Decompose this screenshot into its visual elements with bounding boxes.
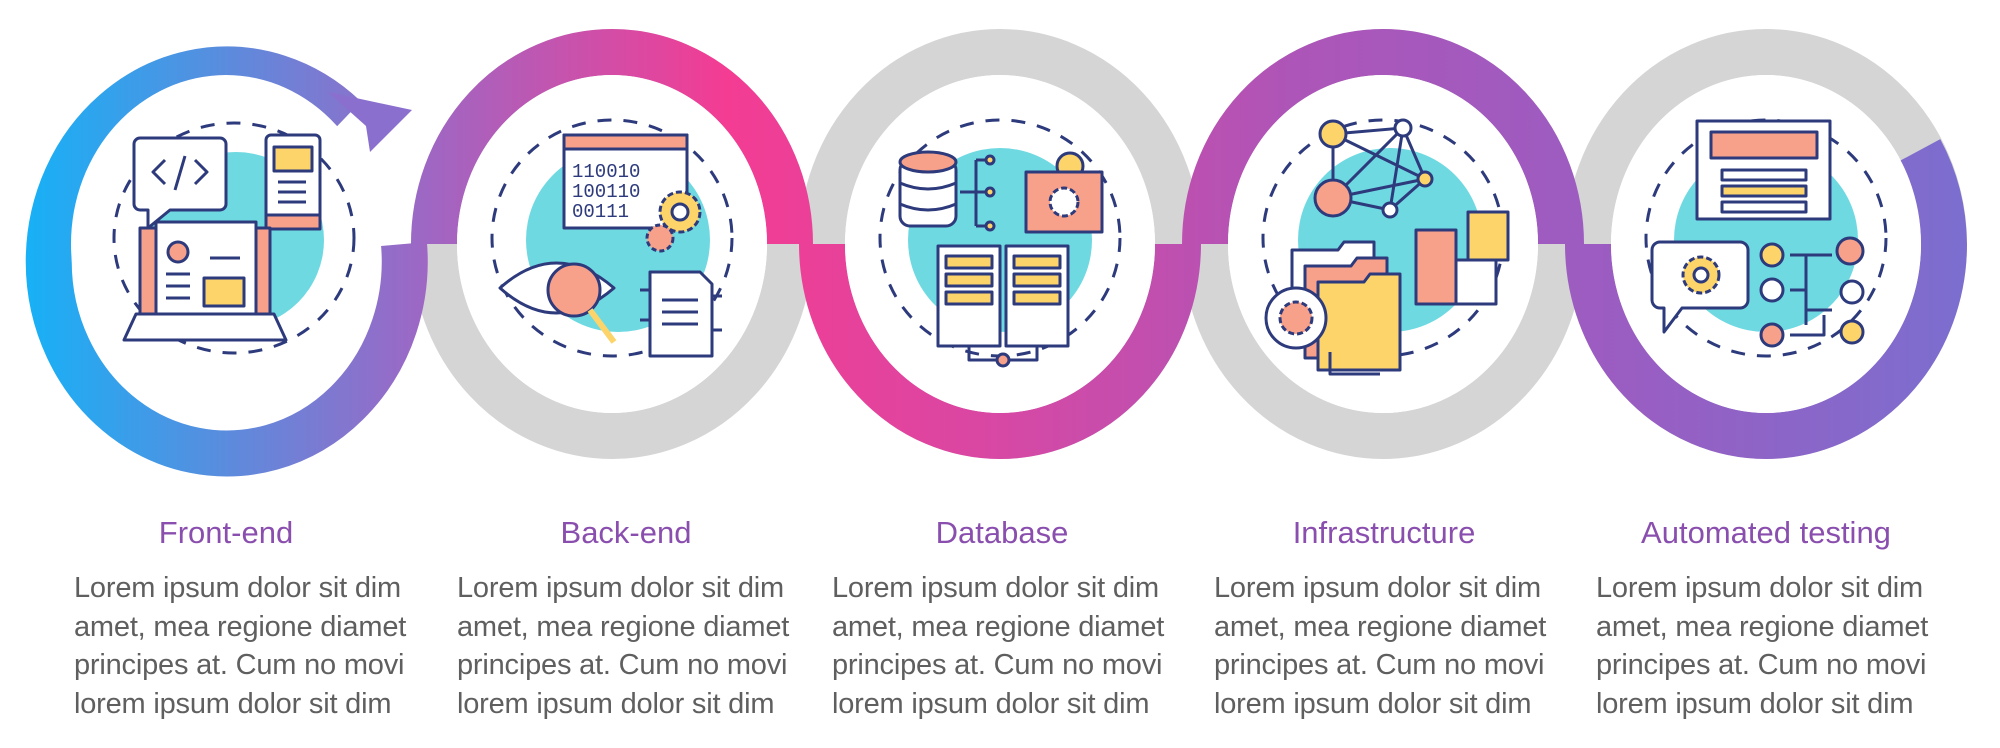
text: Automated testing: principes at. Cum no movi [1596,649,1926,681]
title: Front-end: Front-end [159,515,293,550]
text: Automated testing: amet, mea regione diamet [1596,610,1928,642]
text: Database [832,572,1164,720]
title: Database: Database [936,515,1068,550]
icon: back-end: 110010 [572,161,640,183]
inner white discs [71,75,1921,413]
text: Front-end: lorem ipsum dolor sit dim [74,688,391,720]
text: Automated testing: Lorem ipsum dolor sit dim [1596,572,1923,604]
text: Back-end: amet, mea regione diamet [457,610,789,642]
title: Infrastructure: Infrastructure [1293,515,1475,550]
icon: back-end: 100110 [572,181,640,203]
text: Database: lorem ipsum dolor sit dim [832,688,1149,720]
text: Database: Lorem ipsum dolor sit dim [832,572,1159,604]
dashed rings [114,120,1886,356]
text: Back-end: lorem ipsum dolor sit dim [457,688,774,720]
icon: infrastructure [1266,120,1508,374]
text: Database: principes at. Cum no movi [832,649,1162,681]
text: Infrastructure: Lorem ipsum dolor sit dim [1214,572,1541,604]
icon: database [900,152,1102,366]
text: Infrastructure: principes at. Cum no movi [1214,649,1544,681]
ribbon [49,52,1944,454]
text: Back-end: Lorem ipsum dolor sit dim [457,572,784,604]
text: Front-end [74,572,406,720]
text: Infrastructure: lorem ipsum dolor sit dim [1214,688,1531,720]
title: Automated testing: Automated testing [1641,515,1891,550]
text: Front-end: Lorem ipsum dolor sit dim [74,572,401,604]
icon: automated testing [1652,121,1863,346]
icon: back-end [500,135,722,356]
title: Back-end: Back-end [561,515,691,550]
text: Back-end: principes at. Cum no movi [457,649,787,681]
text: Infrastructure [1214,572,1546,720]
text: Back-end [457,572,790,720]
icon: front-end [124,135,320,340]
text: Database: amet, mea regione diamet [832,610,1164,642]
text: Automated testing: lorem ipsum dolor sit dim [1596,688,1913,720]
text: Front-end: principes at. Cum no movi [74,649,404,681]
text: Infrastructure: amet, mea regione diamet [1214,610,1546,642]
arrow head [328,92,412,152]
text: Front-end: amet, mea regione diamet [74,610,406,642]
gray rings [434,52,1944,436]
text: Automated testing [1596,572,1928,720]
icon: back-end: 00111 [572,201,629,223]
cyan blobs [148,148,1858,332]
